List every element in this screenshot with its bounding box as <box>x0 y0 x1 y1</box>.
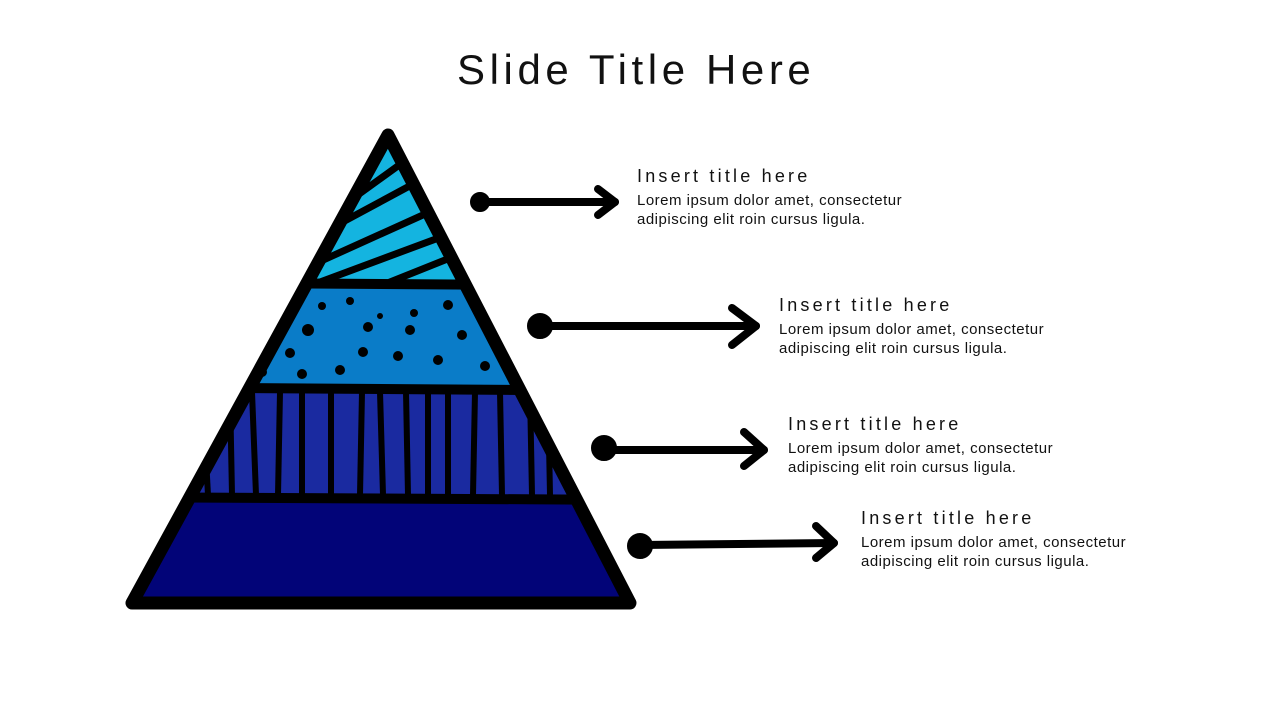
text block 2: adipiscing elit roin cursus ligula. <box>779 340 1007 357</box>
text block 1: Insert title here <box>637 166 810 186</box>
text block 4: adipiscing elit roin cursus ligula. <box>861 553 1089 570</box>
band 4 <box>143 502 620 596</box>
title: Slide Title Here <box>457 46 815 93</box>
text block 4: Insert title here <box>861 508 1034 528</box>
pyramid outline <box>132 135 630 603</box>
band 2 <box>260 288 510 385</box>
text block 2: Lorem ipsum dolor amet, consectetur <box>779 321 1044 338</box>
band 3 <box>200 393 566 495</box>
text block 3: adipiscing elit roin cursus ligula. <box>788 459 1016 476</box>
arrow 1 <box>474 189 615 215</box>
text block 3 <box>788 414 1053 476</box>
arrow 2 <box>531 308 756 345</box>
text block 1: adipiscing elit roin cursus ligula. <box>637 211 865 228</box>
text block 4: Lorem ipsum dolor amet, consectetur <box>861 534 1126 551</box>
band 1 <box>316 148 456 280</box>
text block 2: Insert title here <box>779 295 952 315</box>
arrow 3 <box>595 432 764 466</box>
text block 2 <box>779 295 1044 357</box>
text block 4 <box>861 508 1126 570</box>
text block 3: Lorem ipsum dolor amet, consectetur <box>788 440 1053 457</box>
arrow 4 <box>631 526 834 558</box>
text block 3: Insert title here <box>788 414 961 434</box>
text block 1 <box>637 166 902 228</box>
text block 1: Lorem ipsum dolor amet, consectetur <box>637 192 902 209</box>
pyramid diagram <box>126 128 838 610</box>
